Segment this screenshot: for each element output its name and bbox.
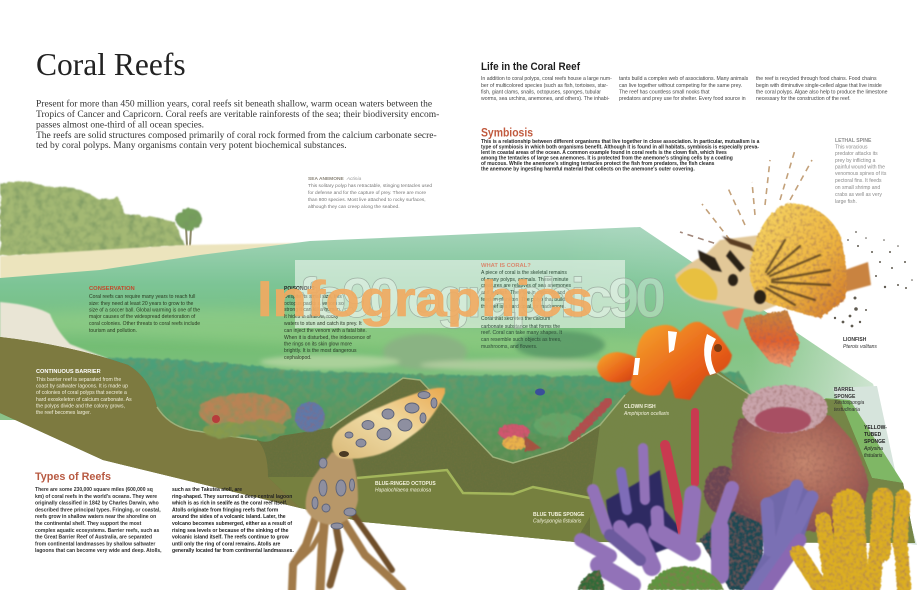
column 1: lagoons that can become very wide and deep. Atolls, — [35, 548, 162, 554]
barrel sponge opening — [755, 407, 811, 433]
column 1: km) of coral reefs in the world's oceans. They were — [35, 494, 157, 500]
pale wedge right — [833, 386, 917, 545]
column 1: ber of multicolored species (such as fish, tortoises, star- — [481, 83, 608, 89]
green coral base — [577, 566, 724, 590]
octopus body — [306, 452, 358, 525]
yellow tube right rear — [900, 497, 903, 545]
column 2: generally located far from continental landmasses. — [172, 548, 294, 554]
column 3: the reef is recycled through food chains. Food chains — [756, 76, 877, 82]
coral: blue ball sponge — [295, 402, 325, 432]
column 1: reefs grow in shallow waters near the shoreline on — [35, 514, 156, 520]
olive reef cross-section — [0, 337, 915, 543]
lethal spine body: pectoral fins. It feeds — [835, 178, 882, 184]
continuous barrier body: coast by saltwater lagoons. It is made up — [36, 384, 128, 390]
icon: palm tree — [176, 208, 202, 246]
small reef fish — [535, 388, 545, 396]
octopus eye — [339, 451, 349, 457]
illustration: yellow-tubed sponge — [798, 497, 904, 590]
conservation title: CONSERVATION — [89, 286, 135, 292]
conservation body: major causes of the widespread deterioration of — [89, 314, 196, 320]
column 2: ring-shaped. They surround a deep central lagoon — [172, 494, 292, 500]
illustration: reef landscape — [0, 181, 917, 545]
sand patch — [0, 302, 112, 360]
text block: symbiosis: of mucous. While the anemone's stinging tentacles protect the fish from predators, the fish cleans — [481, 161, 715, 167]
conservation body: tourism and pollution. — [89, 328, 137, 334]
column 1: originally classified in 1842 by Charles Darwin, who — [35, 501, 159, 507]
label: yellow-tubed sponge: fistularis — [864, 453, 883, 459]
text: blue-ringed octopus callout — [284, 286, 371, 361]
what is coral body: mushrooms, and flowers. — [481, 344, 537, 350]
illustration: lionfish — [675, 150, 913, 367]
conservation body: coral colonies. Other threats to coral reefs include — [89, 321, 200, 327]
watermark orange text: Infographics — [257, 271, 593, 327]
sea anemone body: although they can creep along the seabed. — [308, 204, 400, 210]
lionfish dark fan rays — [766, 240, 830, 305]
lionfish dotted fins — [834, 231, 913, 327]
text block: symbiosis: This is a relationship between different organisms that live together in close association. In particular, mutualism is a — [481, 139, 760, 145]
text block: symbiosis: among the tentacles of large sea anemones. It is protected from the anemone's stinging cells by a coating — [481, 156, 733, 162]
column 1: In addition to coral polyps, coral reefs house a large num- — [481, 76, 612, 82]
blue-violet cluster — [750, 486, 812, 590]
intro text: passes almost one-third of all ocean species. — [36, 120, 204, 130]
text: what is coral — [481, 263, 572, 350]
water haze right — [560, 227, 880, 420]
column 1: complex aquatic ecosystems. Barrier reefs, such as — [35, 528, 159, 534]
what is coral body: Coral that secretes the calcium — [481, 316, 550, 322]
label: yellow-tubed sponge: YELLOW- — [864, 425, 887, 431]
lethal spine body: crabs as well as very — [835, 192, 882, 198]
watermark: infographics — [257, 266, 666, 329]
yellow tube middle rear — [880, 498, 883, 552]
forest on the shore — [0, 181, 184, 256]
lionfish face markings — [698, 236, 766, 304]
illustration: clown fish — [597, 322, 732, 400]
clown fish eye — [714, 344, 722, 352]
column 3: the coral polyps. Algae also help to produce the limestone — [756, 90, 888, 96]
column 3: necessary for the construction of the reef. — [756, 96, 851, 102]
watermark outline text: fo90 ographic90 — [298, 266, 666, 329]
column 1: fish, giant clams, snails, octopuses, sponges, tubular — [481, 90, 601, 96]
bright strata line — [357, 470, 590, 498]
misty reef crests — [260, 331, 620, 371]
continuous barrier body: This barrier reef is separated from the — [36, 377, 121, 383]
label: yellow-tubed sponge: SPONGE — [864, 439, 886, 445]
barrel sponge rim — [742, 385, 828, 433]
lionfish spines — [680, 150, 812, 250]
text: conservation — [89, 286, 200, 334]
column 2: until only the ring of coral remains. Atolls are — [172, 541, 281, 547]
illustration: barrel sponge — [704, 385, 868, 535]
heading: life in the coral reef: Life in the Coral Reef — [481, 61, 580, 73]
coral: red spot — [212, 415, 220, 423]
beach — [0, 243, 300, 280]
label: clown fish: Amphiprion ocellaris — [623, 411, 670, 417]
lionfish small fin — [722, 306, 745, 330]
callout: sea anemone — [308, 176, 432, 210]
column 1: There are some 230,000 square miles (600,000 sq — [35, 487, 153, 493]
coral: pink colony — [498, 424, 541, 452]
label: barrel sponge: BARREL — [834, 387, 855, 393]
lagoon — [105, 358, 760, 480]
column 2: Atolls originate from fringing reefs that form — [172, 507, 279, 513]
continuous barrier body: the polyps divide and the colony grows, — [36, 404, 125, 410]
lethal spine title: LETHAL SPINE — [835, 138, 872, 144]
lionfish lower fin — [743, 310, 800, 367]
what is coral title: WHAT IS CORAL? — [481, 263, 531, 269]
what is coral body: the reef is a hard coral, or madrepore. — [481, 304, 566, 310]
column 1: described three principal types. Fringing, or coastal, — [35, 507, 161, 513]
yellow tube left — [823, 520, 833, 590]
octopus callout body: the rings on its skin glow more — [284, 342, 352, 348]
what is coral body: carbonate substance that forms the — [481, 324, 560, 330]
yellow tube right front — [901, 548, 904, 590]
yellow tube front — [798, 553, 822, 590]
barrel sponge left lobe — [704, 466, 740, 514]
conservation body: Coral reefs can require many years to reach full — [89, 294, 195, 300]
intro text: ted by coral polyps. Many organisms contain very potent biochemical substances. — [36, 141, 347, 151]
octopus callout body: can inject the venom with a fatal bite. — [284, 328, 367, 334]
sea anemone body: This solitary polyp has retractable, stinging tentacles used — [308, 183, 432, 189]
column 2: around the sides of a volcanic island. Later, the — [172, 514, 286, 520]
label: barrel sponge: SPONGE — [834, 394, 856, 400]
octopus callout body: strong it can kill a human. — [284, 307, 341, 313]
label: yellow-tubed sponge: TUBED — [864, 432, 882, 438]
callout: lethal spine — [835, 138, 887, 205]
what is coral body: feed on plankton. The polyp that builds — [481, 297, 568, 303]
column 3: begin with diminutive single-celled algae that live inside — [756, 83, 882, 89]
reef outline — [157, 372, 750, 463]
heading: types of reefs: Types of Reefs — [35, 471, 111, 483]
octopus callout body: Despite its small size, this — [284, 294, 342, 300]
octopus callout body: It hides in shallow, rocky — [284, 314, 339, 320]
continuous barrier body: of colonies of coral polyps that secrete a — [36, 390, 127, 396]
text block: life in the coral reef — [481, 76, 888, 102]
lethal spine body: This voracious — [835, 144, 868, 150]
intro text: Present for more than 450 million years, coral reefs sit beneath shallow, warm ocean waters between the — [36, 98, 432, 110]
continuous barrier body: hard exoskeleton of calcium carbonate. As — [36, 397, 132, 403]
clown fish rear fin — [597, 352, 640, 382]
column 2: predators and prey use for shelter. Every food source in — [619, 96, 746, 102]
column 2: such as the Takutea atoll, are — [172, 487, 242, 493]
octopus mantle — [332, 388, 445, 459]
shallow water — [0, 227, 880, 420]
label: barrel sponge: testudinaria — [834, 407, 860, 413]
sea anemone body: for defense and for the capture of prey. There are more — [308, 190, 426, 196]
octopus callout body: When it is disturbed, the iridescence of — [284, 335, 371, 341]
octopus callout body: waters to stun and catch its prey. It — [284, 321, 362, 327]
column 2: tants build a complex web of associations. Many animals — [619, 76, 749, 82]
what is coral body: can resemble such objects as trees, — [481, 337, 562, 343]
lionfish pectoral fan — [750, 203, 847, 318]
column 2: which is as rich in sealife as the coral reef itself. — [171, 501, 288, 507]
column 2: volcanic island itself. The reefs continue to grow — [172, 535, 289, 541]
red tube sponges — [665, 412, 695, 533]
what is coral body: creatures are relatives of sea anemones — [481, 283, 572, 289]
octopus callout body: octopus packs a venom so — [284, 301, 344, 307]
coral: green bushes — [507, 390, 586, 437]
label: blue-ringed octopus: Hapalochlaena maculosa — [375, 488, 431, 494]
text block: symbiosis: lent in coastal areas of the ocean. A common example found in coral reefs is the clown fish, which lives — [481, 150, 727, 156]
what is coral body: of many polyps, animals. These minute — [481, 277, 569, 283]
text: continuous barrier — [36, 369, 132, 416]
water horizon light band — [0, 308, 690, 360]
illustration: blue tube sponge — [577, 412, 817, 590]
label: blue tube sponge: Callyspongia fistularis — [533, 518, 582, 524]
illustration: blue-ringed octopus — [292, 388, 445, 590]
clown fish white bands — [633, 358, 640, 375]
yellow tube short — [873, 552, 876, 590]
octopus callout title: POISONOUS — [284, 286, 315, 292]
coral: orange colony — [199, 393, 291, 438]
lethal spine body: venomous spines of its — [835, 171, 887, 177]
octopus callout body: cephalopod. — [284, 355, 312, 361]
what is coral body: A piece of coral is the skeletal remains — [481, 270, 567, 276]
label: blue-ringed octopus: BLUE-RINGED OCTOPUS — [375, 481, 436, 487]
lower strata — [268, 470, 600, 542]
continuous barrier title: CONTINUOUS BARRIER — [36, 369, 101, 375]
purple tube sponges — [581, 448, 732, 585]
octopus callout body: brightly. It is the most dangerous — [284, 348, 357, 354]
label: yellow-tubed sponge: Aplysina — [863, 446, 883, 452]
lethal spine body: prey by inflicting a — [835, 158, 876, 164]
text block: types of reefs — [35, 487, 294, 554]
conservation body: size of a soccer ball. Global warming is one of the — [89, 308, 200, 314]
label: blue tube sponge: BLUE TUBE SPONGE — [533, 512, 585, 518]
column 1: the Great Barrier Reef of Australia, are separated — [35, 535, 152, 541]
text block: symbiosis: the anemone by ingesting harmful material that collects on the anemone's outer covering. — [481, 166, 695, 172]
yellow tube large — [848, 505, 853, 590]
intro text: Tropics of Cancer and Capricorn. Coral reefs are veritable rainforests of the sea; their biodiversity encom- — [36, 109, 439, 120]
barrel sponge body — [728, 415, 868, 535]
column 1: from continental landmasses by shallow saltwater — [35, 541, 155, 547]
label: lionfish: Pterois volitans — [843, 344, 877, 350]
column 1: worms, sea urchins, anemones, and others). The inhabi- — [481, 96, 610, 102]
lethal spine body: painful wound with the — [835, 164, 885, 170]
coral: red finger coral — [572, 402, 608, 438]
lethal spine body: predator attacks its — [835, 151, 878, 157]
green slope right — [825, 398, 903, 500]
continuous barrier body: the reef becomes larger. — [36, 410, 91, 416]
lethal spine body: on small shrimp and — [835, 185, 880, 191]
lethal spine body: large fish. — [835, 199, 857, 205]
watermark panel — [295, 260, 625, 328]
octopus rings — [312, 392, 437, 529]
lionfish head and body — [675, 235, 790, 312]
blue-violet mass — [745, 483, 817, 590]
sea anemone title: SEA ANEMONE Actinia — [308, 176, 362, 182]
column 1: the continental shelf. They support the most — [35, 521, 142, 527]
label: clown fish: CLOWN FISH — [624, 404, 656, 410]
what is coral body: and jellyfish. They live in colonies and — [481, 290, 566, 296]
octopus tentacles — [292, 510, 402, 590]
dark sponge shadows — [606, 470, 690, 555]
column 2: rising sea levels or because of the sinking of the — [172, 528, 289, 534]
clown fish body — [630, 322, 732, 400]
what is coral body: reef. Coral can take many shapes. It — [481, 330, 563, 336]
column 2: The reef has countless small nooks that — [619, 90, 710, 96]
label: barrel sponge: Xestospongia — [833, 400, 865, 406]
label: lionfish: LIONFISH — [843, 337, 867, 343]
sea anemone body: than 800 species. Most live attached to rocky surfaces, — [308, 197, 426, 203]
teal coral mass — [700, 510, 765, 590]
heading: symbiosis: Symbiosis — [481, 126, 533, 140]
text block: symbiosis: type of symbiosis in which both organisms benefit. Although it is found in all habitats, symbiosis is especially preva- — [481, 144, 759, 150]
lighter olive right — [590, 368, 915, 543]
light olive left bank — [0, 337, 300, 508]
column 2: can live together without competing for the same prey. — [619, 83, 742, 89]
intro text: The reefs are solid structures composed primarily of coral rock formed from the calcium carbonate secre- — [36, 130, 437, 141]
column 2: volcano becomes submerged, either as a result of — [172, 521, 292, 527]
title: Coral Reefs — [36, 47, 186, 82]
conservation body: size: they need at least 20 years to grow to the — [89, 301, 194, 307]
lionfish tail — [845, 262, 871, 292]
